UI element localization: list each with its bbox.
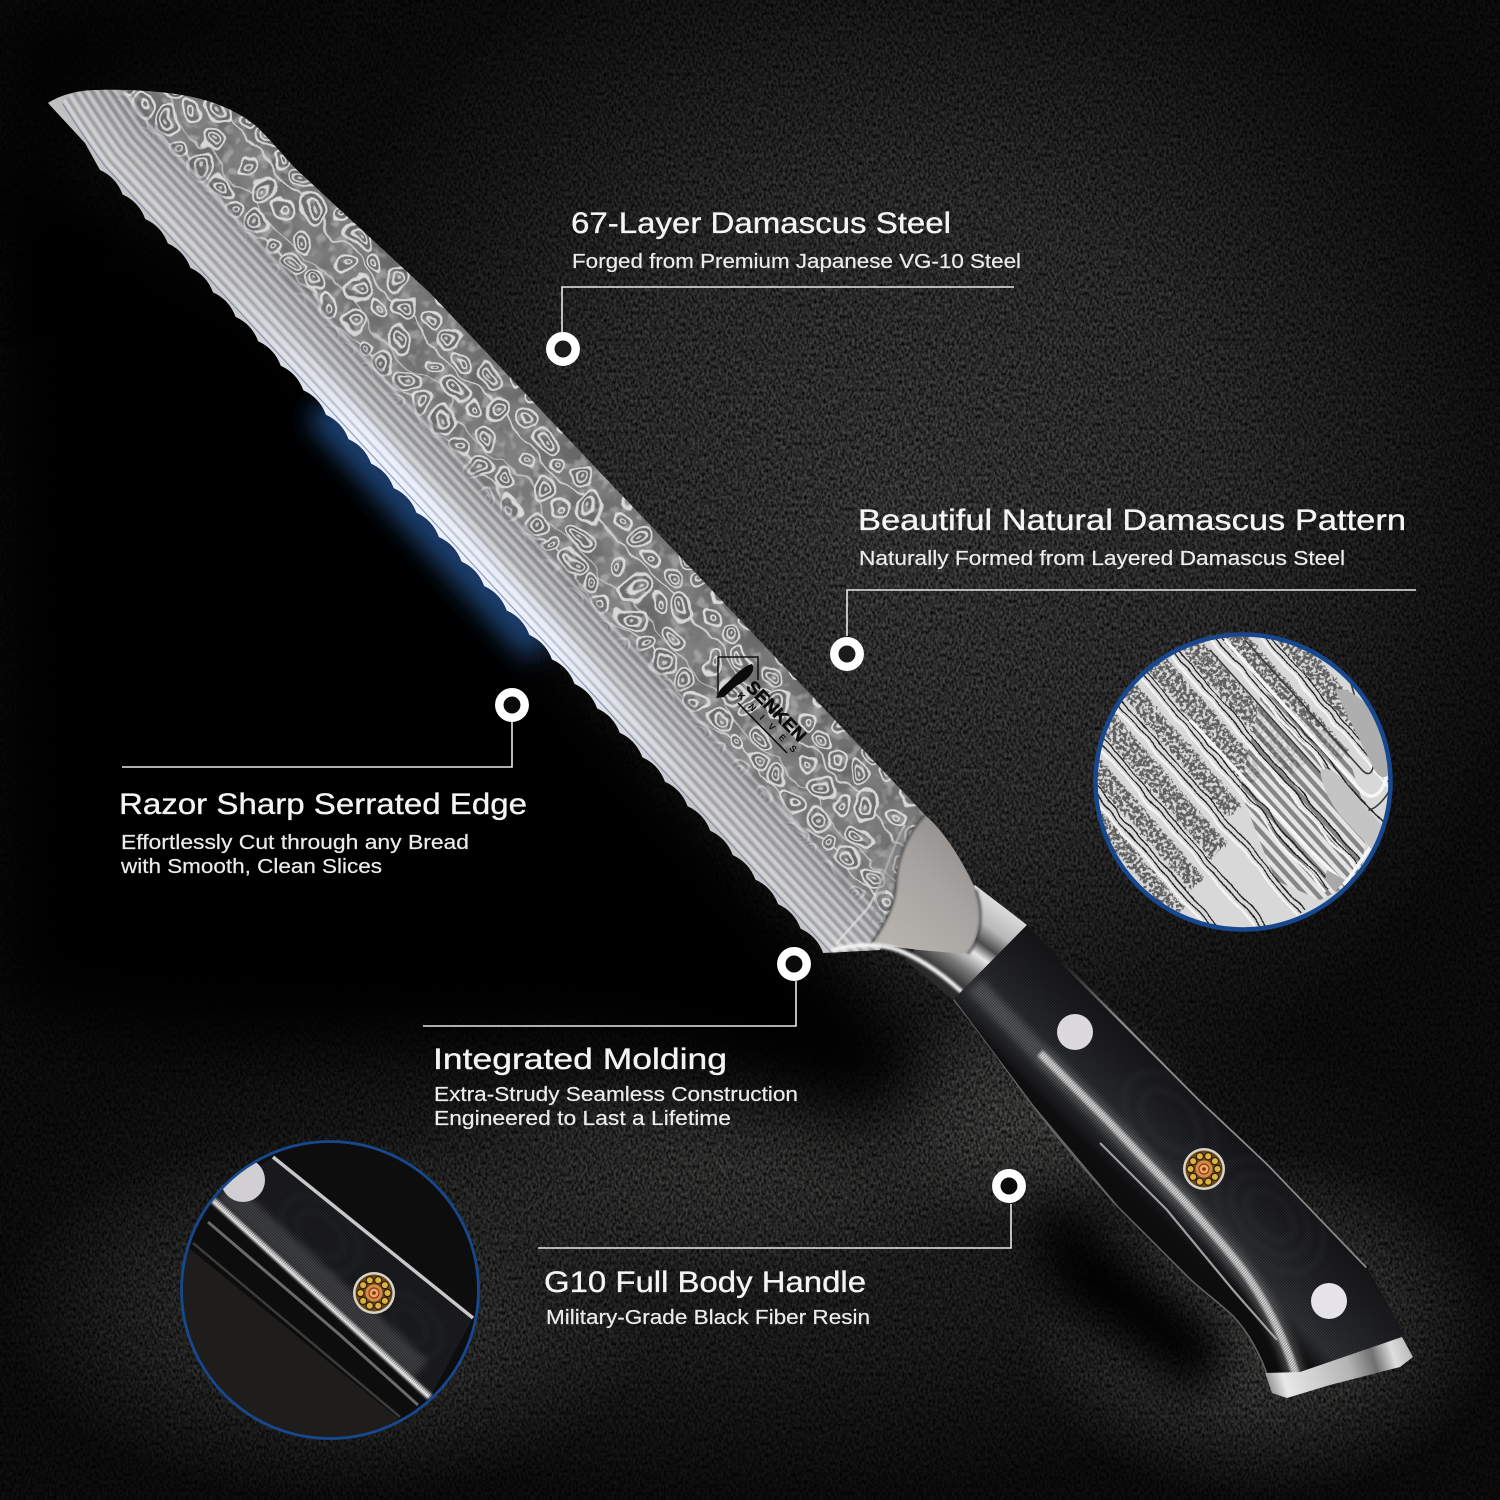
callout: G10 Full Body Handle: G10 Full Body Handle — [544, 1266, 866, 1299]
logo: Senken Knives: KNIVES — [736, 690, 799, 754]
logo: Senken Knives: SENKEN — [742, 677, 810, 746]
blade with damascus pattern — [48, 90, 925, 953]
callout: Razor Sharp Serrated Edge — [119, 692, 527, 878]
bolster integrated molding — [832, 815, 981, 992]
zoom circle: G10 handle detail — [175, 1135, 485, 1445]
callout: 67-Layer Damascus Steel: Forged from Premium Japanese VG-10 Steel — [572, 250, 1021, 273]
callout: Razor Sharp Serrated Edge: Effortlessly Cut through any Bread — [121, 831, 469, 854]
callout: G10 Full Body Handle: Military-Grade Black Fiber Resin — [546, 1306, 870, 1329]
callout: Integrated Molding: Integrated Molding — [433, 1043, 727, 1076]
callout: Razor Sharp Serrated Edge: Razor Sharp Serrated Edge — [119, 788, 527, 821]
bolster neck — [905, 885, 1027, 1000]
mosaic pin — [353, 1272, 395, 1314]
lower dark field — [183, 1248, 399, 1437]
handle band — [210, 1157, 473, 1397]
handle G10 — [953, 925, 1405, 1373]
callout: Integrated Molding: Engineered to Last a Lifetime — [434, 1107, 731, 1130]
callout: Beautiful Natural Damascus Pattern: Naturally Formed from Layered Damascus Steel — [859, 547, 1345, 570]
callout: 67-Layer Damascus Steel: 67-Layer Damascus Steel — [571, 207, 951, 240]
handle butt cap — [1265, 1337, 1413, 1398]
navy light glow along serrated edge — [320, 408, 540, 648]
callout: Integrated Molding: Extra-Strudy Seamless Construction — [434, 1083, 798, 1106]
callout: Beautiful Natural Damascus Pattern — [834, 504, 1416, 667]
handle rivets — [1057, 1014, 1347, 1319]
zoom circle: damascus pattern detail — [1093, 632, 1393, 932]
chevron folds — [1190, 640, 1390, 884]
rivet — [223, 1162, 265, 1202]
callout: Razor Sharp Serrated Edge: with Smooth, Clean Slices — [120, 855, 382, 878]
callout: G10 Full Body Handle — [538, 1173, 1022, 1329]
callout: Integrated Molding — [423, 951, 807, 1130]
callout: 67-Layer Damascus Steel — [550, 207, 1021, 362]
logo: Senken Knives — [716, 657, 810, 754]
callout: Beautiful Natural Damascus Pattern: Beautiful Natural Damascus Pattern — [858, 504, 1406, 537]
mosaic pin — [1183, 1148, 1225, 1190]
ladder hatch region — [1240, 690, 1368, 900]
